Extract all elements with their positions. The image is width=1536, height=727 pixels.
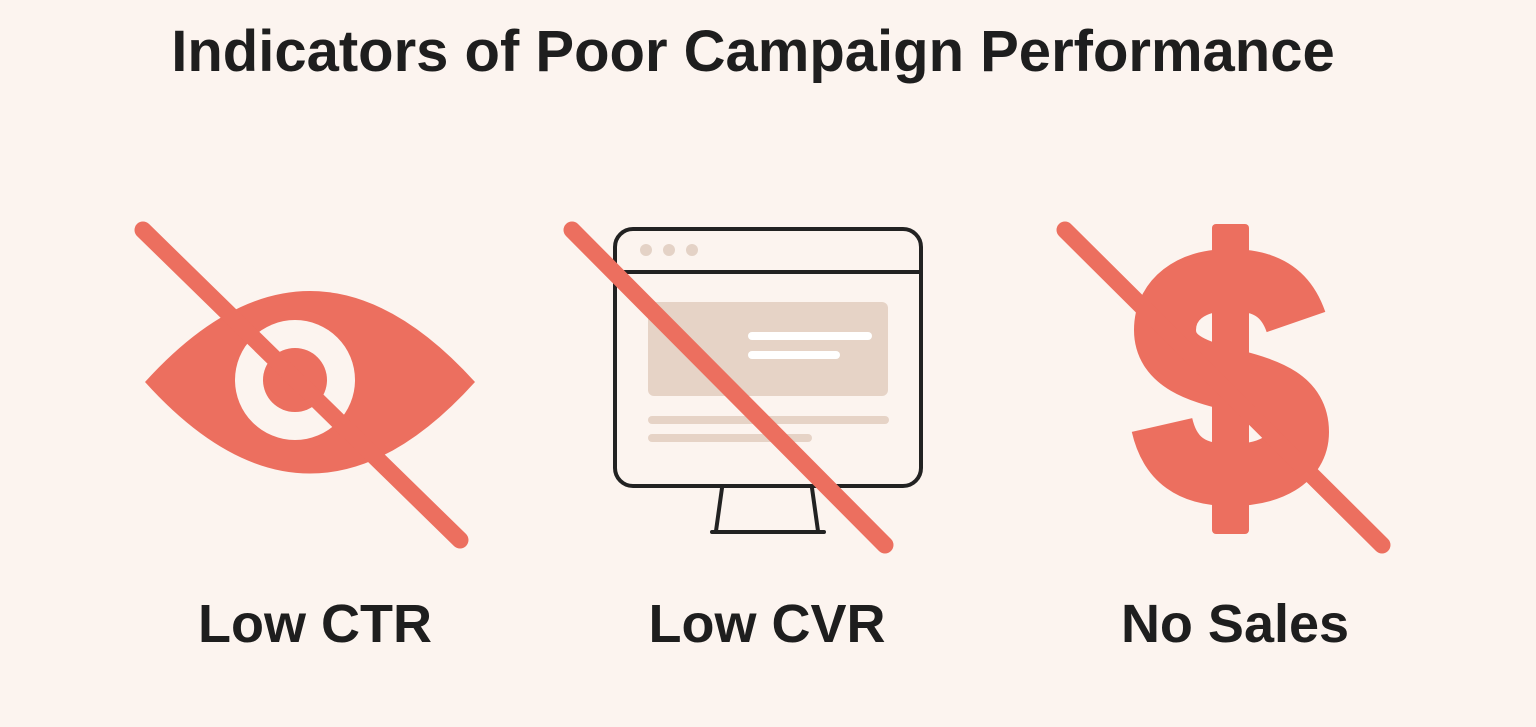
label: No Sales: No Sales (1121, 594, 1349, 654)
icon: crossed monitor (572, 229, 921, 545)
label: Low CVR: Low CVR (648, 594, 886, 654)
icon: crossed eye (143, 230, 475, 540)
label: Low CTR: Low CTR (198, 594, 432, 654)
title: Indicators of Poor Campaign Performance (171, 19, 1335, 84)
icon: crossed dollar (1065, 224, 1382, 545)
